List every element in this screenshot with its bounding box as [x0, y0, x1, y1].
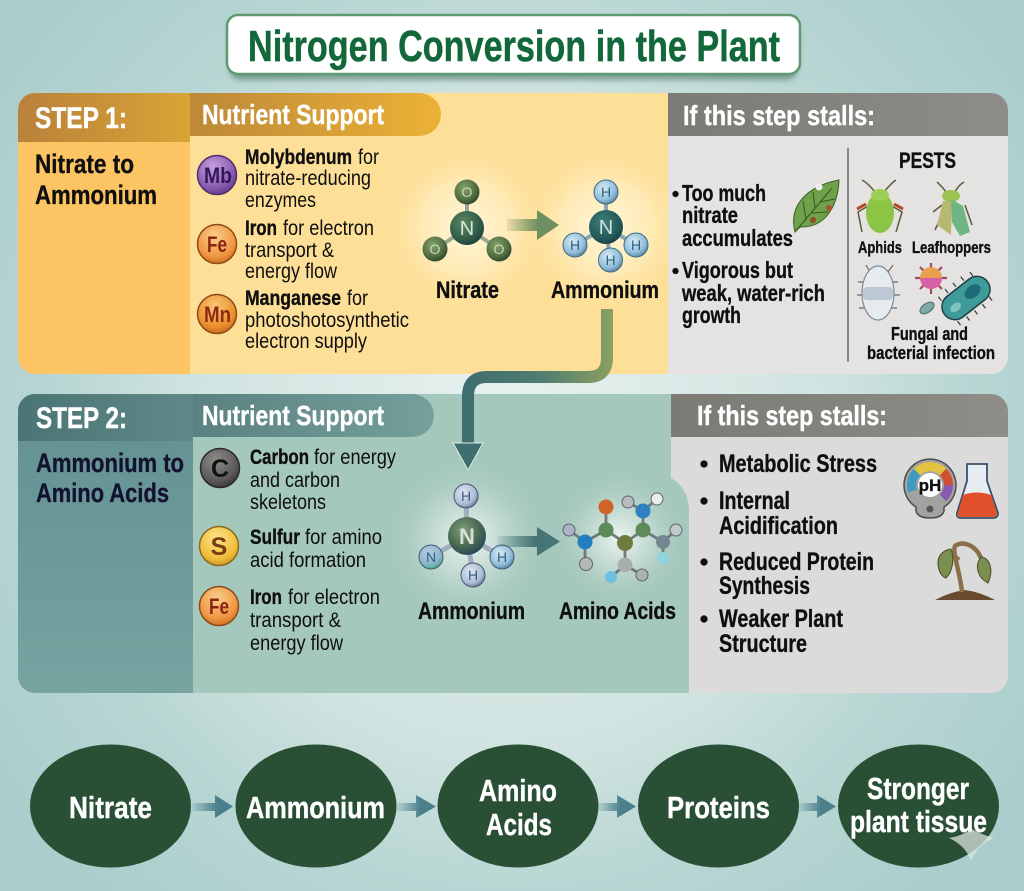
- ammonium molecule: N: [426, 549, 436, 565]
- stall bullets: Vigorous but: [682, 257, 793, 283]
- text: iron: transport &: [250, 609, 341, 632]
- text: sulfur: acid formation: [250, 549, 366, 572]
- icon: mealybug: [857, 265, 900, 320]
- icon: bacterium: [932, 266, 1000, 330]
- stall bullets: [700, 450, 877, 658]
- stall bullets: accumulates: [682, 225, 793, 251]
- text: manganese: [245, 287, 409, 353]
- stall bullets: Synthesis: [719, 572, 810, 600]
- panel: step 1: [18, 93, 1008, 374]
- text: sulfur: Sulfur: [250, 526, 300, 549]
- heading: pests: PESTS: [899, 148, 956, 173]
- stall bullets: Acidification: [719, 512, 838, 540]
- text: iron: for electron: [288, 586, 380, 609]
- text: molybdenum: nitrate-reducing: [245, 167, 371, 190]
- nitrate molecule: O: [494, 241, 505, 257]
- text: manganese: electron supply: [245, 330, 367, 353]
- stall bullets: Internal: [719, 487, 790, 515]
- text: molybdenum: enzymes: [245, 189, 316, 212]
- icon: manganese: [198, 294, 236, 334]
- step 2 title: Amino Acids: [36, 478, 169, 508]
- flow: stronger plant tissue oval: [838, 744, 999, 868]
- icon: carbon: C: [211, 455, 229, 483]
- stall bullets: Weaker Plant: [719, 605, 844, 633]
- flow: nitrate oval: Nitrate: [69, 790, 152, 825]
- label: nitrate: Nitrate: [436, 277, 499, 304]
- title: Nitrogen Conversion in the Plant: [248, 22, 780, 71]
- icon: flask: [957, 464, 998, 518]
- stall bullets: Reduced Protein: [719, 548, 874, 576]
- ammonium molecule: [563, 180, 648, 272]
- ammonium molecule: H: [468, 567, 478, 583]
- ammonium molecule: [419, 484, 514, 587]
- step 2 title: [36, 448, 184, 508]
- flow: stronger plant tissue oval: plant tissue: [850, 804, 987, 839]
- nitrate molecule: O: [430, 241, 441, 257]
- icon: iron: Fe: [209, 594, 229, 619]
- text: carbon: for energy: [314, 446, 396, 469]
- ammonium molecule: N: [459, 524, 475, 549]
- icon: sulfur: [200, 526, 238, 566]
- nitrate molecule: [422, 180, 512, 262]
- heading: if this step stalls: If this step stalls:: [683, 100, 875, 131]
- flow: proteins oval: [638, 744, 799, 868]
- panel: step 2: [18, 394, 1008, 693]
- watermark star: [949, 829, 994, 861]
- step 2 label: STEP 2:: [36, 402, 127, 435]
- icon: molybdenum: [198, 156, 236, 194]
- flow: amino acids oval: Acids: [486, 807, 552, 842]
- text: manganese: photoshotosynthetic: [245, 309, 409, 332]
- ammonium molecule: H: [497, 549, 507, 565]
- flow: ammonium oval: Ammonium: [246, 790, 385, 825]
- text: molybdenum: Molybdenum: [245, 146, 352, 169]
- text: iron: Iron: [245, 217, 277, 240]
- label: aphids: Aphids: [858, 238, 902, 257]
- label: fungal and bacterial infection: Fungal and: [891, 324, 968, 344]
- flow: proteins oval: Proteins: [667, 790, 770, 825]
- icon: carbon: [200, 448, 240, 488]
- flow arrow: [799, 795, 836, 818]
- text: iron: Iron: [250, 586, 282, 609]
- arrow: nitrate to ammonium: [507, 210, 559, 240]
- text: iron: transport &: [245, 239, 334, 262]
- text: iron: [250, 586, 380, 655]
- text: iron: energy flow: [250, 632, 344, 655]
- heading: nutrient support: Nutrient Support: [202, 400, 384, 431]
- step 1 title: [35, 149, 157, 210]
- icon: leafhopper: [933, 182, 972, 236]
- title: [227, 15, 800, 80]
- ammonium molecule: H: [601, 184, 611, 200]
- flow arrow: [192, 795, 233, 818]
- heading: if this step stalls: If this step stalls:: [697, 400, 887, 431]
- step 1 label: STEP 1:: [35, 102, 127, 135]
- label: fungal and bacterial infection: bacterial infection: [867, 343, 995, 363]
- label: amino acids: Amino Acids: [559, 598, 676, 625]
- text: sulfur: [250, 526, 382, 572]
- flow: stronger plant tissue oval: Stronger: [867, 771, 969, 806]
- stall bullets: nitrate: [682, 202, 738, 228]
- text: iron: energy flow: [245, 260, 338, 283]
- stall bullets: Too much: [682, 180, 766, 206]
- flow: amino acids oval: Amino: [479, 773, 557, 808]
- icon: aphid: [857, 180, 903, 233]
- ammonium molecule: H: [605, 252, 616, 268]
- label: fungal and bacterial infection: [867, 324, 995, 363]
- label: leafhoppers: Leafhoppers: [912, 238, 991, 257]
- flow: nitrate oval: [30, 744, 191, 868]
- arrow: ammonium to amino acids: [497, 527, 560, 556]
- step 1 title: Ammonium: [35, 180, 157, 210]
- text: manganese: Manganese: [245, 287, 341, 310]
- icon: iron: [200, 586, 238, 626]
- icon: iron: Fe: [207, 232, 227, 257]
- icon: iron: [198, 224, 236, 264]
- text: manganese: for: [347, 287, 368, 310]
- text: iron: [245, 217, 374, 283]
- text: carbon: Carbon: [250, 446, 309, 469]
- text: carbon: [250, 446, 396, 514]
- nitrate molecule: N: [460, 218, 474, 240]
- stall bullets: [672, 180, 825, 328]
- icon: virus: [915, 263, 947, 294]
- ammonium molecule: N: [599, 217, 613, 239]
- divider: [847, 148, 849, 362]
- amino acid molecule: [563, 493, 682, 583]
- flow arrow: [397, 795, 436, 818]
- ammonium molecule: H: [570, 237, 580, 253]
- icon: damaged leaf: [794, 180, 839, 232]
- icon: pH gauge: pH: [919, 476, 941, 495]
- icon: pH gauge: [904, 459, 956, 518]
- label: ammonium: Ammonium: [551, 277, 659, 304]
- flow: ammonium oval: [236, 744, 396, 868]
- flow arrow: [598, 795, 636, 818]
- text: molybdenum: [245, 146, 379, 212]
- icon: small microbe: [918, 300, 936, 316]
- icon: molybdenum: Mb: [204, 163, 232, 188]
- text: carbon: and carbon: [250, 469, 340, 492]
- stall bullets: Structure: [719, 630, 807, 658]
- label: ammonium: Ammonium: [418, 598, 525, 625]
- text: molybdenum: for: [358, 146, 379, 169]
- stall bullets: Metabolic Stress: [719, 450, 877, 478]
- text: iron: for electron: [283, 217, 374, 240]
- stall bullets: growth: [682, 302, 741, 328]
- icon: sulfur: S: [211, 533, 227, 561]
- icon: wilting plant: [935, 544, 995, 600]
- arrow: step 1 to step 2: [453, 309, 607, 470]
- step 1 title: Nitrate to: [35, 149, 134, 179]
- ammonium molecule: H: [631, 237, 641, 253]
- stall bullets: weak, water-rich: [681, 280, 825, 306]
- icon: manganese: Mn: [204, 302, 231, 327]
- heading: nutrient support: Nutrient Support: [202, 99, 384, 130]
- ammonium molecule: H: [461, 488, 471, 504]
- text: carbon: skeletons: [250, 491, 326, 514]
- step 2 title: Ammonium to: [36, 448, 184, 478]
- flow: amino acids oval: [438, 744, 598, 868]
- text: sulfur: for amino: [305, 526, 382, 549]
- nitrate molecule: O: [462, 184, 473, 200]
